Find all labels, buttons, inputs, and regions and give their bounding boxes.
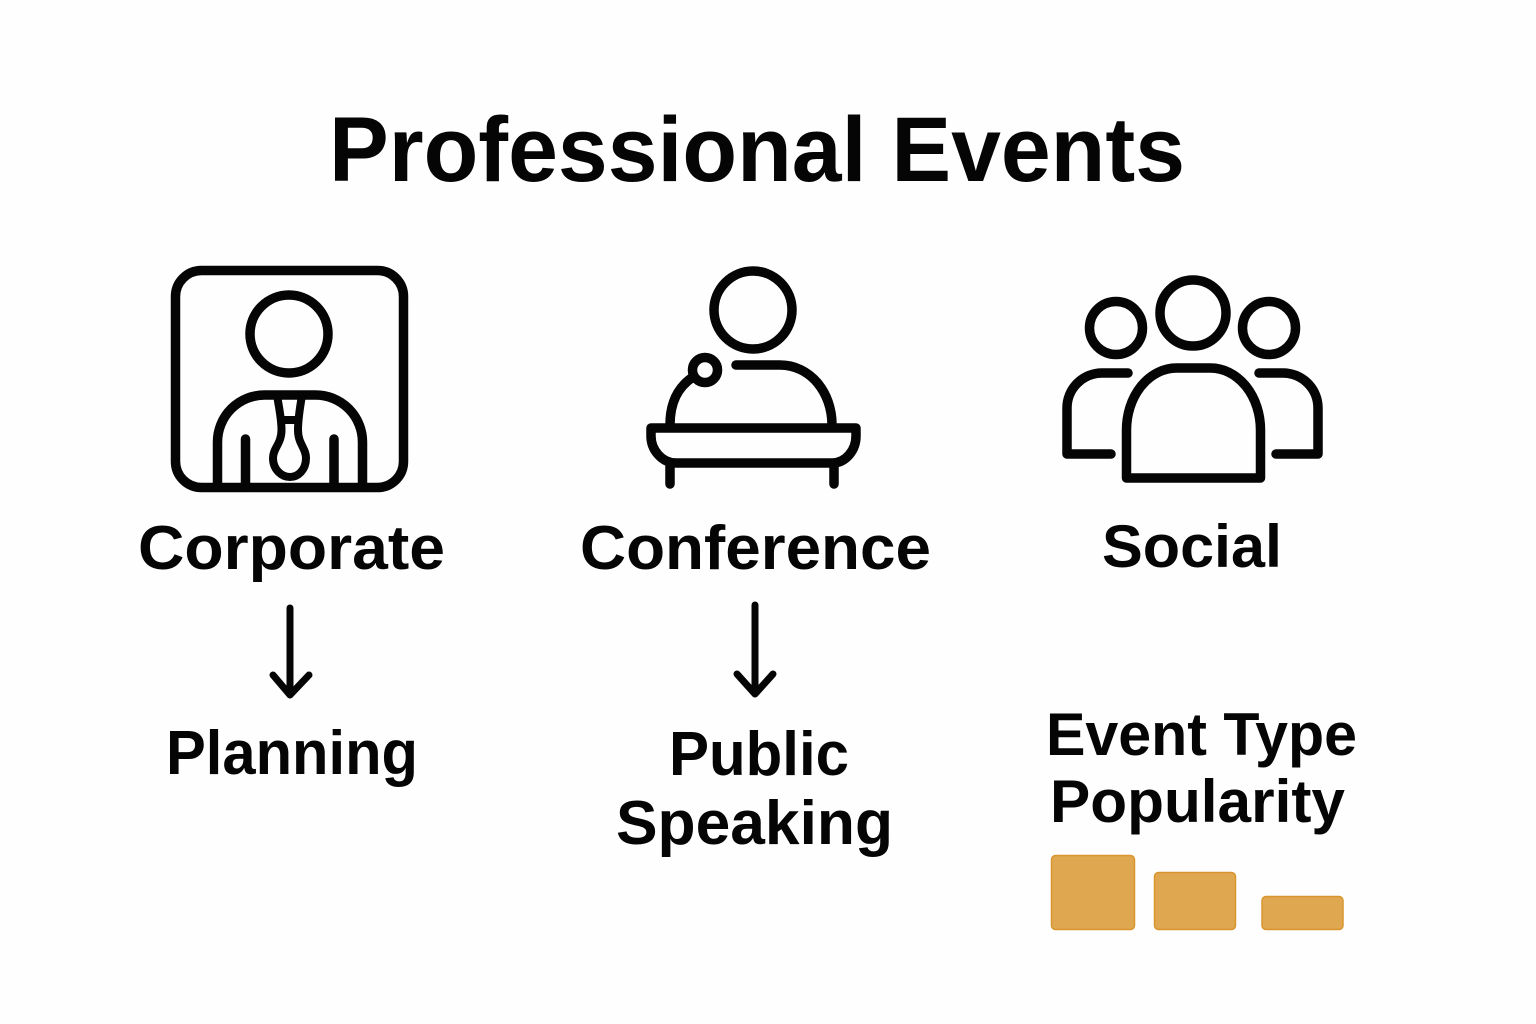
icon: group of three people — [1067, 280, 1318, 478]
bar: largest — [1052, 856, 1134, 930]
label: Public Speaking — [616, 720, 893, 858]
heading: Event Type Popularity — [1046, 701, 1357, 835]
label: Conference: Conference — [580, 514, 931, 583]
label: Corporate: Corporate — [138, 514, 445, 583]
title: Professional Events — [329, 99, 1185, 201]
bar chart: event type popularity — [1052, 856, 1343, 930]
bar: smallest — [1262, 896, 1343, 930]
label: Planning: Planning — [166, 719, 418, 788]
heading: Event Type Popularity: Popularity — [1050, 768, 1346, 835]
label: Public Speaking: Public — [669, 720, 849, 789]
heading: Event Type Popularity: Event Type — [1046, 701, 1357, 768]
icon: speaker at podium — [651, 271, 856, 484]
icon: corporate person with tie — [176, 270, 404, 488]
label: Public Speaking: Speaking — [616, 789, 893, 858]
arrow: conference to public speaking — [737, 605, 773, 694]
label: Social: Social — [1102, 513, 1282, 580]
arrow: corporate to planning — [273, 608, 309, 695]
bar: middle — [1154, 872, 1236, 930]
